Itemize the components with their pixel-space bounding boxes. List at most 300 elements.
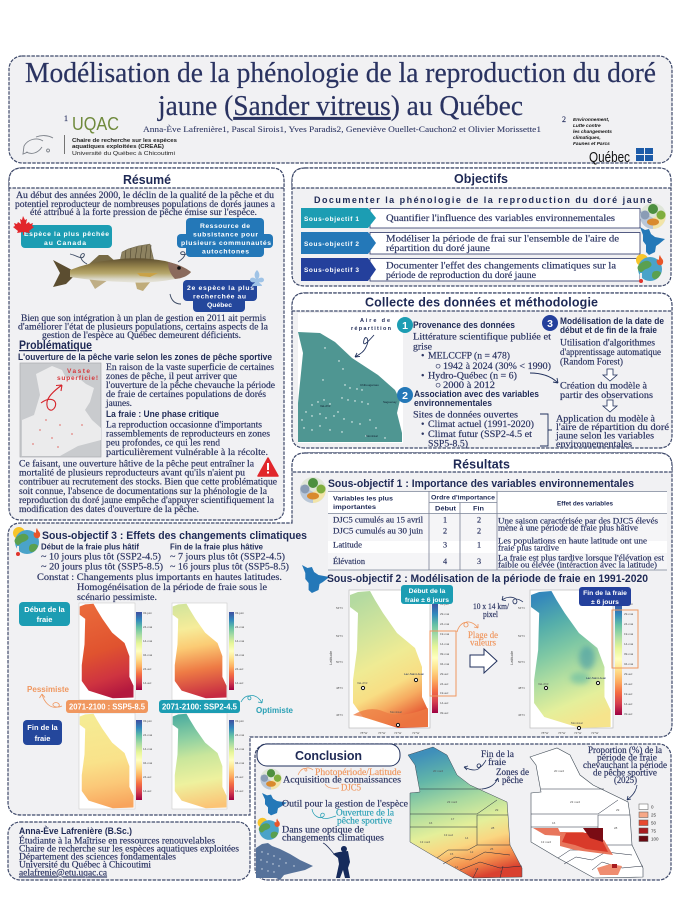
legend: overlap: 0 <box>651 804 654 810</box>
map: start of spawning 1991-2020: 50°N <box>336 660 343 664</box>
icon: Quebec <box>302 565 330 593</box>
contact details: Université du Québec à Chicoutimi <box>19 860 151 870</box>
text block: spawning: peu profondes, ce qui les rend <box>106 438 220 448</box>
colour bar tick labels: 14-avr. <box>235 789 244 793</box>
map: start of spawning 1991-2020: 19-avr. <box>440 691 449 695</box>
step 2: environmental variables: Association avec des variables <box>414 389 539 399</box>
icon: Quebec <box>262 793 287 815</box>
map: Quebec fishing zones: Vaste <box>67 368 90 375</box>
text block: zone size: zones de pêche, il peut arriver que <box>106 371 238 382</box>
map: end of spawning 1991-2020: 76°W <box>558 731 566 735</box>
map: overlap proportion <box>530 748 643 878</box>
illustration: fish <box>256 843 313 880</box>
table: variable importance: fraie plus tardive <box>498 544 559 552</box>
sub-objective 3: Sous-objectif 3 <box>304 267 359 274</box>
map: distribution area: Aire de <box>360 318 390 324</box>
map: start of spawning 1991-2020: 46°N <box>336 713 343 717</box>
arrow: down 1 <box>603 369 617 381</box>
sub-objective 2: répartition du doré jaune <box>386 243 491 254</box>
icon: warning <box>258 458 278 476</box>
step 2: environmental variables: Climat futur (SSP2-4.5 et <box>428 429 532 440</box>
colour bar tick labels: 24-avr. <box>143 667 152 671</box>
step 1: data sources: • <box>421 370 424 382</box>
heading: problématique: Problématique <box>19 338 92 352</box>
contact details: aelafrenie@etu.uqac.ca <box>19 868 108 878</box>
table: variable importance: Élévation <box>333 556 365 566</box>
table: variable importance <box>328 491 667 570</box>
table: variable importance: Variables les plus <box>333 496 393 502</box>
logo: research chair: Chaire de recherche sur les espèces <box>72 138 177 144</box>
scenario pill: SSP2-4.5: 2071-2100: SSP2-4.5 <box>162 702 238 712</box>
map: start of spawning 1991-2020: Lac-Saint-Jean <box>404 672 425 676</box>
text block: knowledge: Photopériode/Latitude <box>315 767 402 778</box>
colour bar tick labels: 14-avr. <box>143 681 152 685</box>
map: end of spawning 1991-2020: 09-mai <box>624 652 634 656</box>
label: start of spawning: Début de la <box>409 588 446 595</box>
sub-objective 1 <box>301 208 640 228</box>
text block: intro: Au début des années 2000, le déclin de la qualité de la pêche et du <box>16 190 274 201</box>
step 3: modelling: d'apprentissage automatique <box>560 347 662 358</box>
map: overlap proportion: 13 nord <box>541 840 552 844</box>
heading: sous-objectif 3: Sous-objectif 3 : Effets des changements climatiques <box>42 530 307 542</box>
step 1: data sources: • <box>421 350 424 362</box>
text block: finding: scénario pessimiste. <box>77 592 157 603</box>
main objective: Documenter la phénologie de la reproduction du doré jaune <box>314 195 652 205</box>
text block: earlier start: ~ 20 jours plus tôt (SSP5-8.5) <box>41 562 163 572</box>
map: end of spawning 1991-2020: 29-avr. <box>624 672 633 676</box>
text block: management tool: pêche sportive <box>337 816 393 826</box>
text block: finding: Constat : Changements plus importants en hautes latitudes. <box>37 572 282 583</box>
sub-objective 1: Sous-objectif 1 <box>304 216 359 223</box>
table: variable importance: 2 <box>477 516 481 524</box>
text block: intro: potentiel reproducteur de nombreuses populations de dorés jaunes a <box>15 199 276 210</box>
map: start of spawning 1991-2020 <box>328 590 450 735</box>
heading: résultats: Résultats <box>453 458 510 472</box>
table: variable importance: 4 <box>443 557 447 566</box>
text block: zone size: En raison de la vaste superficie de certaines <box>106 362 274 373</box>
panel: contact <box>8 822 250 880</box>
step 2: environmental variables: 2 <box>402 390 408 402</box>
colour bar tick labels: 14-mai <box>143 639 153 643</box>
heading: sous-objectif 2: Sous-objectif 2 : Modélisation de la période de fraie en 1991-2020 <box>327 573 648 585</box>
map: end of spawning 1991-2020: 46°N <box>518 713 525 717</box>
colour bar tick labels: 04-mai <box>143 761 153 765</box>
map: start of spawning 1991-2020: 78°W <box>360 731 368 735</box>
map: end of spawning 1991-2020: 14-avr. <box>624 702 633 706</box>
map: end of spawning by zone: 18 <box>475 867 479 871</box>
text block: conclusion of problem <box>19 458 278 515</box>
map: start of spawning 1991-2020: 09-avr. <box>440 711 449 715</box>
step 1: data sources: ○ <box>435 380 441 391</box>
note: resolution: 10 x 14 km/ <box>473 602 510 611</box>
callout: most fished in Canada <box>13 216 112 248</box>
map: start of spawning 1991-2020: Montréal <box>390 710 402 714</box>
sub-objective 3: période de reproduction du doré jaune <box>386 270 537 281</box>
map: end of spawning 1991-2020: 72°W <box>591 731 599 735</box>
map: Quebec fishing zones <box>20 363 101 457</box>
colour bar tick labels: 03-juin <box>235 611 244 615</box>
note: value range <box>457 622 499 648</box>
map: end of spawning by zone <box>408 747 522 878</box>
map: end of spawning 1991-2020: 54°N <box>518 606 525 610</box>
panel: header <box>9 56 672 166</box>
callout: most fished in Canada: Espèce la plus pêchée <box>24 231 109 238</box>
step 3: modelling: jaune selon les variables <box>555 430 654 442</box>
map: end of spawning 1991-2020: 14-mai <box>624 642 634 646</box>
logo: research chair: aquatiques exploitées (CREAE) <box>72 144 164 150</box>
logo: research chair <box>23 135 177 157</box>
logo: Quebec ministry: 2 <box>562 115 566 124</box>
legend: overlap: 100 <box>651 836 659 842</box>
map: start of spawning 1991-2020: 74°W <box>394 731 402 735</box>
text block: earlier end: ~ 16 jours plus tôt (SSP5-8.5) <box>170 562 289 572</box>
note: resolution <box>473 596 523 619</box>
colour bar tick labels: 14-avr. <box>143 789 152 793</box>
table: variable importance: importantes <box>333 504 376 511</box>
table: variable importance: Effet des variables <box>557 500 613 508</box>
map: start of spawning 1991-2020: 14-mai <box>440 642 450 646</box>
map: overlap proportion: 28 <box>614 826 618 830</box>
label: fin de la fraie <box>23 720 62 745</box>
map: end of spawning by zone: 13 sud <box>444 833 453 837</box>
map: start of spawning 1991-2020: 24-avr. <box>440 682 449 686</box>
map: end of spawning by zone: 29 <box>495 808 499 812</box>
contact details <box>19 834 239 878</box>
map: start of spawning 1991-2020: 04-mai <box>440 662 450 666</box>
text block: knowledge: Acquisition de connaissances <box>283 774 401 786</box>
map: end of spawning by zone: 15 <box>450 852 454 856</box>
map: end of spawning by zone: 16 <box>429 821 433 825</box>
text block: climate change <box>282 824 384 844</box>
text block: conclusion of problem: mortalité de plusieurs reproducteurs avant qu'ils n'aient pu <box>19 468 245 478</box>
text block: conclusion of problem: modification des dates d'ouverture de la pêche. <box>19 504 199 515</box>
callout: second most sought in Quebec <box>183 270 264 312</box>
text block: knowledge: DJC5 <box>341 782 361 794</box>
colour bar tick labels: 03-juin <box>143 719 152 723</box>
arrows to fish <box>70 252 195 304</box>
step 2: environmental variables: SSP5-8.5) <box>428 438 468 450</box>
text block: management tool: Ouverture de la <box>336 808 395 818</box>
logo: Quebec ministry <box>562 115 653 166</box>
text block: zone size: de fraie de certaines populations de dorés <box>106 389 266 400</box>
value range highlight: left <box>430 631 456 696</box>
table: variable importance: La fraie est plus tardive lorsque l'élévation est <box>498 554 665 562</box>
map: end of spawning by zone: 12 <box>470 850 474 854</box>
colour bar tick labels: 24-mai <box>143 733 153 737</box>
text block: management plan: Bien que son intégration à un plan de gestion en 2011 ait permis <box>21 313 266 324</box>
map: end of spawning by zone: 28 <box>491 826 495 830</box>
map: end of spawning 1991-2020: 04-mai <box>624 662 634 666</box>
text block: spawning <box>106 420 270 458</box>
callout: zones de pêche <box>482 767 530 789</box>
label: début de la fraie: fraie <box>37 615 52 624</box>
logo: Quebec ministry: Faunes et Parcs <box>573 141 610 147</box>
logo: Quebec ministry: Lutte contre <box>573 123 601 129</box>
callout: second most sought in Quebec: recherchée au <box>193 294 246 300</box>
text block: spawning: rassemblements de reproducteurs en zones <box>106 428 270 440</box>
label: fin de la fraie: fraie <box>35 734 50 743</box>
map: start of spawning 1991-2020: 03-juin <box>440 602 449 606</box>
step 1: data sources: MELCCFP (n = 478) <box>428 350 510 362</box>
map: end of spawning 1991-2020: 78°W <box>541 731 549 735</box>
label: start of spawning: fraie ± 6 jours <box>405 597 449 604</box>
map: distribution area: répartition <box>351 326 392 332</box>
text block: earlier end: Fin de la fraie plus hâtive <box>170 542 264 552</box>
text block: earlier end: ~ 7 jours plus tôt (SSP2-4.5) <box>170 552 285 562</box>
text block: climate change: changements climatiques <box>282 832 384 844</box>
step 3: modelling: l'aire de répartition du doré <box>556 422 670 433</box>
map: overlap proportion: 16 <box>552 821 556 825</box>
illustration: fisherman <box>323 843 350 878</box>
map: start of spawning 1991-2020: 29-avr. <box>440 672 449 676</box>
table: variable importance: DJC5 cumulés au 15 avril <box>333 516 424 524</box>
callout: overlap proportion: (2025) <box>614 775 637 786</box>
text block: finding <box>37 572 282 603</box>
map: start of spawning 1991-2020: 29-mai <box>440 612 450 616</box>
sub-objective 2: Sous-objectif 2 <box>304 241 359 248</box>
step 1: data sources <box>397 317 551 391</box>
map: start of spawning 1991-2020: 48°N <box>336 686 343 690</box>
label: fin de la fraie: Fin de la <box>27 723 59 732</box>
map: end of spawning 1991-2020: Montréal <box>571 721 583 725</box>
step 2: environmental variables: • <box>421 429 424 440</box>
legend: overlap <box>639 804 659 842</box>
table: variable importance: Une saison caractérisée par des DJC5 élevés <box>498 516 658 526</box>
heading: sous-objectif 1: Sous-objectif 1 : Importance des variables environnementales <box>328 478 634 490</box>
map: end of spawning 1991-2020: Latitude <box>509 650 514 665</box>
icon: earth <box>636 254 663 283</box>
table: variable importance: DJC5 cumulés au 30 juin <box>333 526 423 536</box>
map: end of spawning 1991-2020: 19-mai <box>624 632 634 636</box>
colour bar tick labels: 04-mai <box>235 653 245 657</box>
heading: résumé: Résumé <box>123 172 171 187</box>
table: variable importance: 1 <box>443 516 447 524</box>
map: end of spawning 1991-2020 <box>509 590 634 735</box>
table: variable importance: mène à une période de fraie plus hâtive <box>498 524 638 532</box>
map: end of spawning by zone: 23 nord <box>447 800 458 804</box>
icon: fleur-de-lis <box>250 270 264 286</box>
icon: Quebec <box>640 227 665 255</box>
label: start of spawning <box>401 585 453 604</box>
map: start, SSP2-4.5 <box>172 603 234 700</box>
map: end of spawning 1991-2020: 29-mai <box>624 612 634 616</box>
title <box>25 58 656 122</box>
colour bar tick labels: 03-juin <box>235 719 244 723</box>
callout: overlap proportion: chevauchant la période <box>583 760 668 771</box>
step 3: modelling: Modélisation de la date de <box>560 316 664 326</box>
logo: Quebec ministry: Environnement, <box>573 117 609 123</box>
label: début de la fraie: Début de la <box>24 605 66 614</box>
colour bar tick labels: 04-mai <box>235 761 245 765</box>
text block: climate change: Dans une optique de <box>282 824 365 836</box>
map: distribution area: Chibougamau <box>360 383 379 387</box>
callout: fin de la fraie: Fin de la <box>481 749 515 760</box>
table: variable importance: Début <box>435 506 457 512</box>
step 3: modelling: Création du modèle à <box>560 380 648 392</box>
note: resolution: pixel <box>483 610 499 619</box>
text block: management plan <box>18 313 269 341</box>
map: end of spawning 1991-2020: 74°W <box>574 731 582 735</box>
map: end of spawning by zone: 25 <box>490 847 494 851</box>
map: start of spawning 1991-2020: Latitude <box>328 650 333 665</box>
step 2: environmental variables: • <box>421 419 424 430</box>
subheading: fishing opening: L'ouverture de la pêche varie selon les zones de pêche sportive <box>18 352 272 362</box>
text block: earlier start <box>41 542 163 572</box>
sub-objective 2 <box>301 232 640 254</box>
label: end of spawning <box>579 587 631 606</box>
table: variable importance: Ordre d'importance <box>431 494 495 502</box>
text block: management tool: Outil pour la gestion de l'espèce <box>282 798 409 810</box>
map: end of spawning 1991-2020: 48°N <box>518 686 525 690</box>
text block: knowledge <box>283 767 402 794</box>
step 3: modelling <box>542 315 670 450</box>
contact details: Étudiante à la Maîtrise en ressources renouvelables <box>19 834 215 846</box>
step 2: environmental variables: environnementales <box>414 398 492 408</box>
callout: subsistence resource: subsistance pour <box>193 232 258 238</box>
icon: maple leaf <box>13 216 34 235</box>
scenario pill: SSP5-8.5: 2071-2100 : SSP5-8.5 <box>69 702 146 712</box>
colour bar tick labels: 24-mai <box>235 733 245 737</box>
colour bar tick labels: 24-mai <box>143 625 153 629</box>
logo: Quebec ministry: Québec <box>589 150 630 166</box>
heading: conclusion <box>257 744 400 766</box>
step 1: data sources: grise <box>413 342 433 352</box>
subheading: critical phase: La fraie : Une phase critique <box>106 409 219 419</box>
text block: conclusion of problem: Ce faisant, une ouverture hâtive de la pêche peut entraîner la <box>19 458 255 470</box>
table: variable importance: 3 <box>443 540 447 550</box>
table: variable importance: 1 <box>477 540 481 550</box>
colour bar tick labels: 24-avr. <box>143 775 152 779</box>
map: end, SSP2-4.5 <box>172 713 234 809</box>
table: variable importance: 2 <box>443 526 447 536</box>
table: variable importance: Latitude <box>333 540 362 550</box>
authors: Anna-Ève Lafrenière1, Pascal Sirois1, Yves Paradis2, Geneviève Ouellet-Cauchon2 et Olivier Morissette1 <box>143 124 541 134</box>
map: start, SSP5-8.5 <box>79 603 142 700</box>
table: variable importance: 3 <box>477 557 481 566</box>
colour bar tick labels: 14-avr. <box>235 681 244 685</box>
map: start of spawning 1991-2020: 24-mai <box>440 622 450 626</box>
callout: subsistence resource: autochtones <box>202 248 249 256</box>
callout: overlap proportion <box>583 745 668 800</box>
step 2: environmental variables: Climat actuel (1991-2020) <box>428 419 534 430</box>
icon: earth <box>258 818 280 840</box>
step 1: data sources: ○ <box>435 361 441 372</box>
scenario pill: SSP5-8.5 <box>66 700 148 713</box>
contact name: Anna-Ève Lafrenière (B.Sc.) <box>19 826 132 836</box>
sub-objective 3 <box>301 258 640 281</box>
map: start of spawning 1991-2020: 19-mai <box>440 632 450 636</box>
label: optimiste: Optimiste <box>256 706 294 715</box>
map: end of spawning by zone: 20 nord <box>433 769 444 773</box>
logo: Quebec ministry: climatiques, <box>573 135 601 141</box>
contact details: Département des sciences fondamentales <box>19 852 176 862</box>
logo: Quebec ministry: les changements <box>573 129 612 135</box>
legend: overlap: 75 <box>651 828 657 834</box>
map: end of spawning by zone: 13 nord <box>420 840 431 844</box>
step 1: data sources: 2000 à 2012 <box>443 380 495 391</box>
step 3: modelling: Application du modèle à <box>556 414 656 424</box>
sub-objective 2: Modéliser la période de frai sur l'ensemble de l'aire de <box>386 234 620 244</box>
text block: intro: été attribué à la forte pression de pêche émise sur l'espèce. <box>30 207 257 218</box>
step 2: environmental variables <box>397 387 539 450</box>
map: end of spawning by zone: 11 <box>455 865 458 869</box>
heading: objectifs: Objectifs <box>454 172 508 186</box>
map: start of spawning 1991-2020: Val-d'Or <box>357 681 368 685</box>
map: start of spawning 1991-2020: 14-avr. <box>440 701 449 705</box>
text block: management plan: d'améliorer l'état de plusieurs populations, certains aspects de la <box>18 322 269 332</box>
step 3: modelling: environnementales <box>556 439 632 450</box>
label: pessimiste <box>27 685 70 707</box>
map: start of spawning 1991-2020: 72°W <box>412 731 420 735</box>
heading: conclusion: Conclusion <box>295 749 362 763</box>
panel: résumé <box>9 168 284 520</box>
step 1: data sources: 1942 à 2024 (30% < 1990) <box>443 361 551 372</box>
text block: zone size: jaunes. <box>105 398 132 409</box>
logo: UQAC: UQAC <box>72 114 119 134</box>
map: end, SSP5-8.5 <box>79 713 142 809</box>
note: value range: Plage de <box>468 630 499 641</box>
icon: earth <box>13 527 40 556</box>
map: start of spawning 1991-2020: 09-mai <box>440 652 450 656</box>
callout: fin de la fraie: fraie <box>488 757 507 768</box>
icon: trees <box>640 203 666 229</box>
map: end of spawning 1991-2020: 50°N <box>518 660 525 664</box>
map: start of spawning 1991-2020: 52°N <box>336 634 343 638</box>
arrow: data to model <box>530 373 558 383</box>
text block: zone size <box>105 362 276 409</box>
text block: conclusion of problem: soit connue, l'absence de documentations sur la phénologie de la <box>19 486 268 497</box>
callout: overlap proportion: Proportion (%) de la <box>588 745 663 756</box>
note: value range: valeurs <box>470 638 496 648</box>
arrow: down 2 <box>603 400 617 412</box>
text block: spawning: particulièrement vulnérable à la récolte. <box>106 447 268 458</box>
step 1: data sources: Littérature scientifique publiée et <box>413 332 551 342</box>
text block: finding: Homogénéisation de la période de fraie sous le <box>77 582 268 593</box>
bracket <box>540 414 552 446</box>
text block: management plan: gestion de l'espèce au Québec demeurent déficients. <box>42 330 241 341</box>
text block: conclusion of problem: reproduction du doré jaune empêche d'appuyer scientifiquement la <box>19 495 275 506</box>
table: variable importance: faible ou élevée (intéraction avec la latitude) <box>498 560 657 570</box>
panel: objectifs <box>292 168 671 286</box>
map: overlap proportion: 29 <box>616 808 620 812</box>
colour bar tick labels <box>143 611 245 793</box>
text block: zone size: l'ouverture de la pêche chevauche la période <box>106 380 276 391</box>
map: end of spawning by zone: 6 <box>500 870 502 874</box>
map: end of spawning 1991-2020: 03-juin <box>624 602 633 606</box>
text block: management tool <box>282 798 409 826</box>
map: end of spawning by zone: 14 <box>465 836 469 840</box>
icon: trees <box>300 477 326 503</box>
callout: most fished in Canada: au Canada <box>44 240 86 247</box>
step 3: modelling: partir des observations <box>560 390 653 401</box>
colour bar tick labels: 14-mai <box>143 747 153 751</box>
map: overlap proportion: 23 nord <box>570 800 581 804</box>
step 3: modelling: Utilisation d'algorithmes <box>560 338 655 348</box>
map: end of spawning 1991-2020: 09-avr. <box>624 712 633 716</box>
step 3: modelling: 3 <box>547 318 553 330</box>
table: variable importance: Les populations en haute latitude ont une <box>498 536 647 546</box>
text block: earlier start: ~ 10 jours plus tôt (SSP2-4.5) <box>41 552 161 562</box>
value range highlight: right <box>612 610 638 668</box>
map: distribution area: Val-d'Or <box>320 404 331 408</box>
map: distribution area: Saguenay <box>383 400 397 404</box>
callout: zones de pêche: Zones de <box>496 767 530 778</box>
callout: zones de pêche: pêche <box>502 775 524 786</box>
table: variable importance: Fin <box>473 506 484 512</box>
heading: collecte: Collecte des données et méthodologie <box>365 296 598 310</box>
map: end of spawning 1991-2020: 24-avr. <box>624 682 633 686</box>
map: end of spawning 1991-2020: Val-d'Or <box>538 682 549 686</box>
